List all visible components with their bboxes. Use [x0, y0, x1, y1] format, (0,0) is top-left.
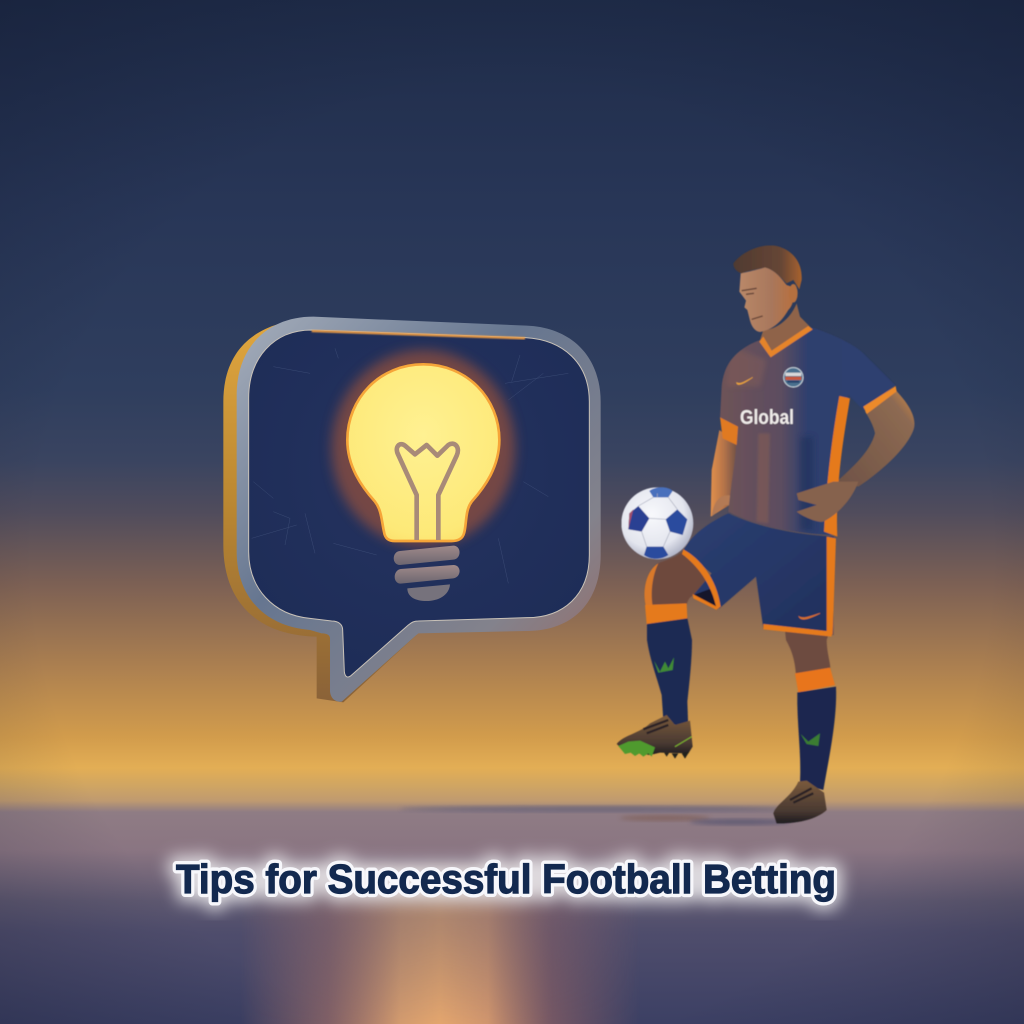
raised boot laces [643, 720, 668, 733]
left cuff [720, 417, 738, 445]
face [739, 267, 793, 332]
raised boot studs [618, 741, 655, 757]
raised boot [617, 715, 693, 755]
sponsor text: Global [740, 406, 794, 429]
bubble gold side extrusion [223, 319, 417, 702]
bubble metal frame [237, 317, 601, 702]
raised sock motif [654, 657, 674, 673]
speech bubble with light bulb [223, 317, 601, 702]
standing boot [773, 781, 827, 823]
swoosh chest [737, 377, 753, 385]
jersey [720, 327, 895, 535]
left hand on hip [712, 495, 735, 517]
left arm [711, 430, 737, 517]
bulb glass [347, 364, 499, 541]
jersey shading [727, 347, 813, 530]
neck [760, 303, 812, 357]
right arm [837, 389, 914, 487]
swoosh shorts [799, 613, 820, 619]
right cuff [863, 386, 897, 414]
orange side panel [824, 396, 850, 537]
bulb glow [332, 350, 515, 547]
standing knee [785, 630, 830, 675]
title: Tips for Successful Football Betting [176, 856, 836, 902]
raised sock [647, 617, 692, 730]
title: Tips for Successful Football Betting [176, 856, 836, 902]
right hand [797, 482, 858, 522]
bulb screw base [394, 546, 460, 601]
bubble dark navy panel [249, 330, 589, 677]
player upper body [621, 245, 914, 637]
hair [733, 245, 802, 289]
bulb filament [397, 444, 458, 540]
crest badge [784, 368, 803, 387]
panel scratches [252, 348, 568, 583]
jersey collar [759, 326, 813, 357]
player lower legs and boots [617, 617, 836, 823]
shorts inner opening [693, 588, 719, 608]
floor reflection and shadows [240, 806, 800, 1024]
standing cuff [795, 668, 835, 692]
boot lime stripe [675, 737, 692, 747]
eyebrow, eye and mouth details [742, 288, 763, 319]
soccer ball [621, 487, 693, 559]
standing sock motif [801, 733, 820, 746]
football player [617, 245, 914, 823]
standing sock [797, 687, 836, 790]
panel top warm reflection [312, 331, 525, 338]
raised cuff [645, 603, 687, 624]
shorts [683, 513, 834, 635]
shorts trims [682, 537, 836, 637]
standing boot laces [790, 788, 813, 803]
ear [789, 284, 798, 303]
title: Tips for Successful Football Betting [176, 856, 836, 902]
raised thigh and knee [644, 551, 713, 607]
